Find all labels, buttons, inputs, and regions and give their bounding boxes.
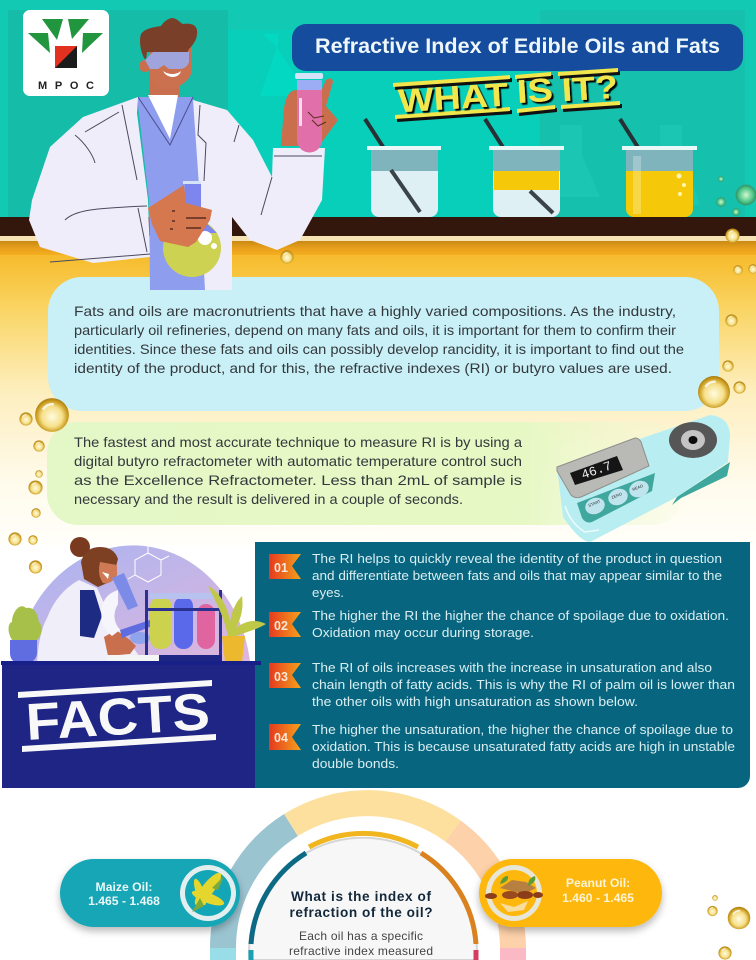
title banner: [292, 24, 743, 71]
microscope: [112, 573, 138, 610]
logo: MPOC: [23, 10, 109, 96]
icon: refractometer: [557, 415, 730, 542]
ring segments: [223, 803, 513, 960]
beaker 1: [365, 119, 441, 217]
test tube hand: [281, 78, 338, 146]
heading: what is it: IT?: [561, 68, 619, 108]
pill: peanut oil: Peanut Oil:: [566, 876, 630, 890]
pill: maize oil: 1.465 - 1.468: [88, 894, 160, 908]
heading: what is it: WHAT: [397, 76, 509, 119]
heading: what is it: IS: [516, 71, 554, 110]
badge 01: 01: [274, 561, 288, 575]
badge 04: 04: [274, 731, 288, 745]
panel: what fats and oils are: identities. Since these fats and oils can possibly develop rancidity, it is important to find out the: [74, 341, 684, 357]
fact 02 text: Oxidation may occur during storage.: [312, 625, 534, 640]
fact 03 text: The RI of oils increases with the increase in unsaturation and also: [312, 660, 712, 675]
face: [150, 44, 192, 89]
center text: [289, 889, 433, 958]
panel: facts title: [1, 661, 261, 788]
fact 04 text: double bonds.: [312, 756, 399, 771]
neck: [149, 66, 179, 100]
panel: what fats and oils are: [48, 277, 719, 411]
icon: corn: [180, 865, 236, 921]
beaker 2: [485, 119, 564, 217]
vest: [137, 97, 216, 290]
icon: refractometer: 46.7: [579, 458, 614, 483]
fact 03 text: [312, 660, 735, 709]
icon: refractometer: ZERO: [611, 491, 623, 500]
panel: what fats and oils are: Fats and oils are macronutrients that have a highly varied compositions. As the industry,: [74, 303, 676, 319]
badge 02: 02: [274, 619, 288, 633]
oil index ring chart: [223, 803, 513, 960]
fact 03 text: the other oils with high unsaturation as shown below.: [312, 694, 638, 709]
coat right: [193, 100, 325, 290]
inner arc segments: [251, 833, 476, 960]
pill: peanut oil: [479, 859, 662, 927]
panel: measuring technique: [47, 422, 680, 525]
left plant: [9, 606, 42, 640]
beaker 3: [620, 119, 697, 217]
woman: [37, 580, 143, 662]
scientist illustration: [29, 18, 338, 290]
fact 01 text: eyes.: [312, 585, 344, 600]
panel: measuring technique: necessary and the result is delivered in a couple of seconds.: [74, 491, 463, 507]
fact 02 text: The higher the RI the higher the chance of spoilage due to oxidation.: [312, 608, 729, 623]
badge 03: 03: [274, 670, 288, 684]
badge 01: [269, 554, 301, 579]
title banner: Refractive Index of Edible Oils and Fats: [315, 34, 720, 58]
fact 01 text: and differentiate between fats and oils that may appear similar to the: [312, 568, 722, 583]
panel: measuring technique: The fastest and most accurate technique to measure RI is by using a: [74, 434, 522, 450]
panel: what fats and oils are: particularly oil refineries, depend on many fats and oils, it is important for them to confirm their: [74, 322, 676, 338]
beakers: [365, 119, 697, 217]
tube rack: [150, 597, 172, 649]
molecule: [128, 545, 169, 582]
fact 04 text: [312, 722, 735, 771]
fact 04 text: oxidation. This is because unsaturated fatty acids are high in unstable: [312, 739, 735, 754]
heading: what is it: [393, 67, 622, 122]
fact 02 text: [312, 608, 729, 640]
fact 01 text: The RI helps to quickly reveal the identity of the product in question: [312, 551, 722, 566]
lab illustration: woman at microscope: [9, 537, 266, 663]
icon: refractometer: READ: [632, 483, 644, 492]
flask: [163, 219, 221, 277]
flask hand: [148, 185, 212, 247]
logo: MPOC: MPOC: [38, 80, 94, 92]
white shirt: [148, 95, 178, 139]
pill: maize oil: Maize Oil:: [96, 880, 152, 894]
panel: facts list: [255, 542, 750, 788]
center text: refraction of the oil?: [290, 905, 432, 920]
fact 03 text: chain length of fatty acids. This is why the RI of palm oil is lower than: [312, 677, 735, 692]
panel: facts title: FACTS: [24, 683, 211, 752]
icon: peanuts: [485, 865, 543, 921]
center text: Each oil has a specific: [299, 929, 423, 943]
panel: measuring technique: digital butyro refractometer with automatic temperature control such: [74, 453, 522, 469]
pill: maize oil: [60, 859, 240, 927]
right plant: [208, 586, 266, 636]
fact 01 text: [312, 551, 722, 600]
fact 04 text: The higher the unsaturation, the higher the chance of spoilage due to: [312, 722, 733, 737]
panel: what fats and oils are: identity of the product, and for this, the refractive indexes (RI) or butyro values are used.: [74, 360, 672, 376]
center text: refractive index measured: [289, 944, 433, 958]
icon: refractometer: START: [588, 498, 602, 508]
badge 02: [269, 612, 301, 637]
pill: peanut oil: 1.460 - 1.465: [562, 891, 634, 905]
center text: What is the index of: [291, 889, 431, 904]
badge 04: [269, 724, 301, 750]
hair: [140, 18, 197, 60]
shelf and oil surface: [0, 217, 756, 255]
coat left: [29, 97, 150, 263]
header lab background: [0, 0, 756, 217]
panel: measuring technique: as the Excellence Refractometer. Less than 2mL of sample is: [74, 472, 522, 488]
inner circle: [249, 838, 477, 960]
badge 03: [269, 663, 301, 688]
